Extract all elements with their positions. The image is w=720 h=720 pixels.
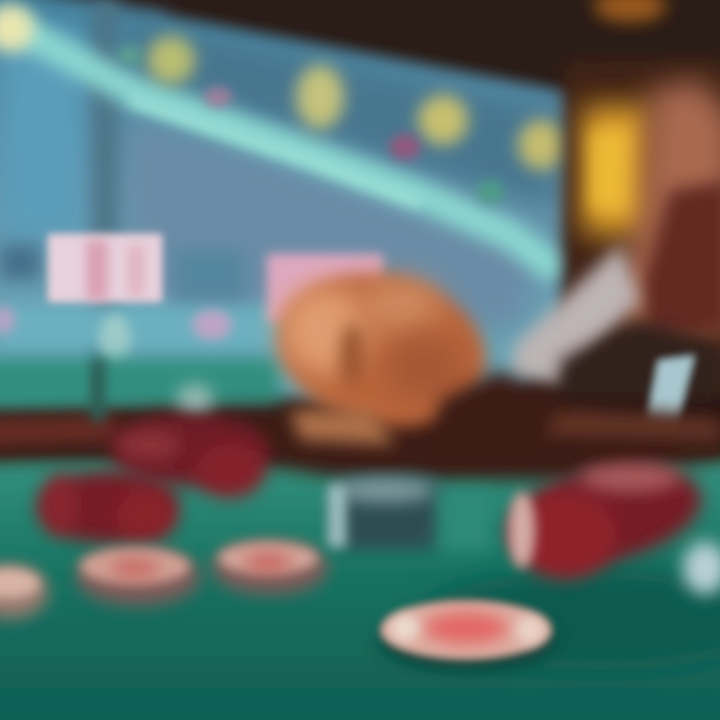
illustration: central fist: [264, 255, 560, 460]
panel: green felt table: [0, 358, 720, 720]
illustration: raised hand on right: [510, 80, 720, 432]
icons: yellow board lights: [0, 4, 564, 204]
chart line: teal diagonal band: [20, 30, 550, 265]
icon: dark and white chip stack at centre: [328, 478, 490, 550]
icons: red chip stack, right: [500, 450, 720, 594]
icons: pink and white cards on board: [0, 234, 383, 366]
panel: dark ceiling strip: [170, 0, 720, 85]
icon: foreground white and red chip: [379, 601, 555, 670]
panel: blue display board: [0, 0, 570, 400]
panel: dark wooden table edge: [0, 360, 720, 480]
icons: red poker chip stacks, left: [38, 414, 270, 543]
panel: warm glow on right: [565, 60, 720, 390]
icons: flat chips on felt: [0, 542, 328, 618]
